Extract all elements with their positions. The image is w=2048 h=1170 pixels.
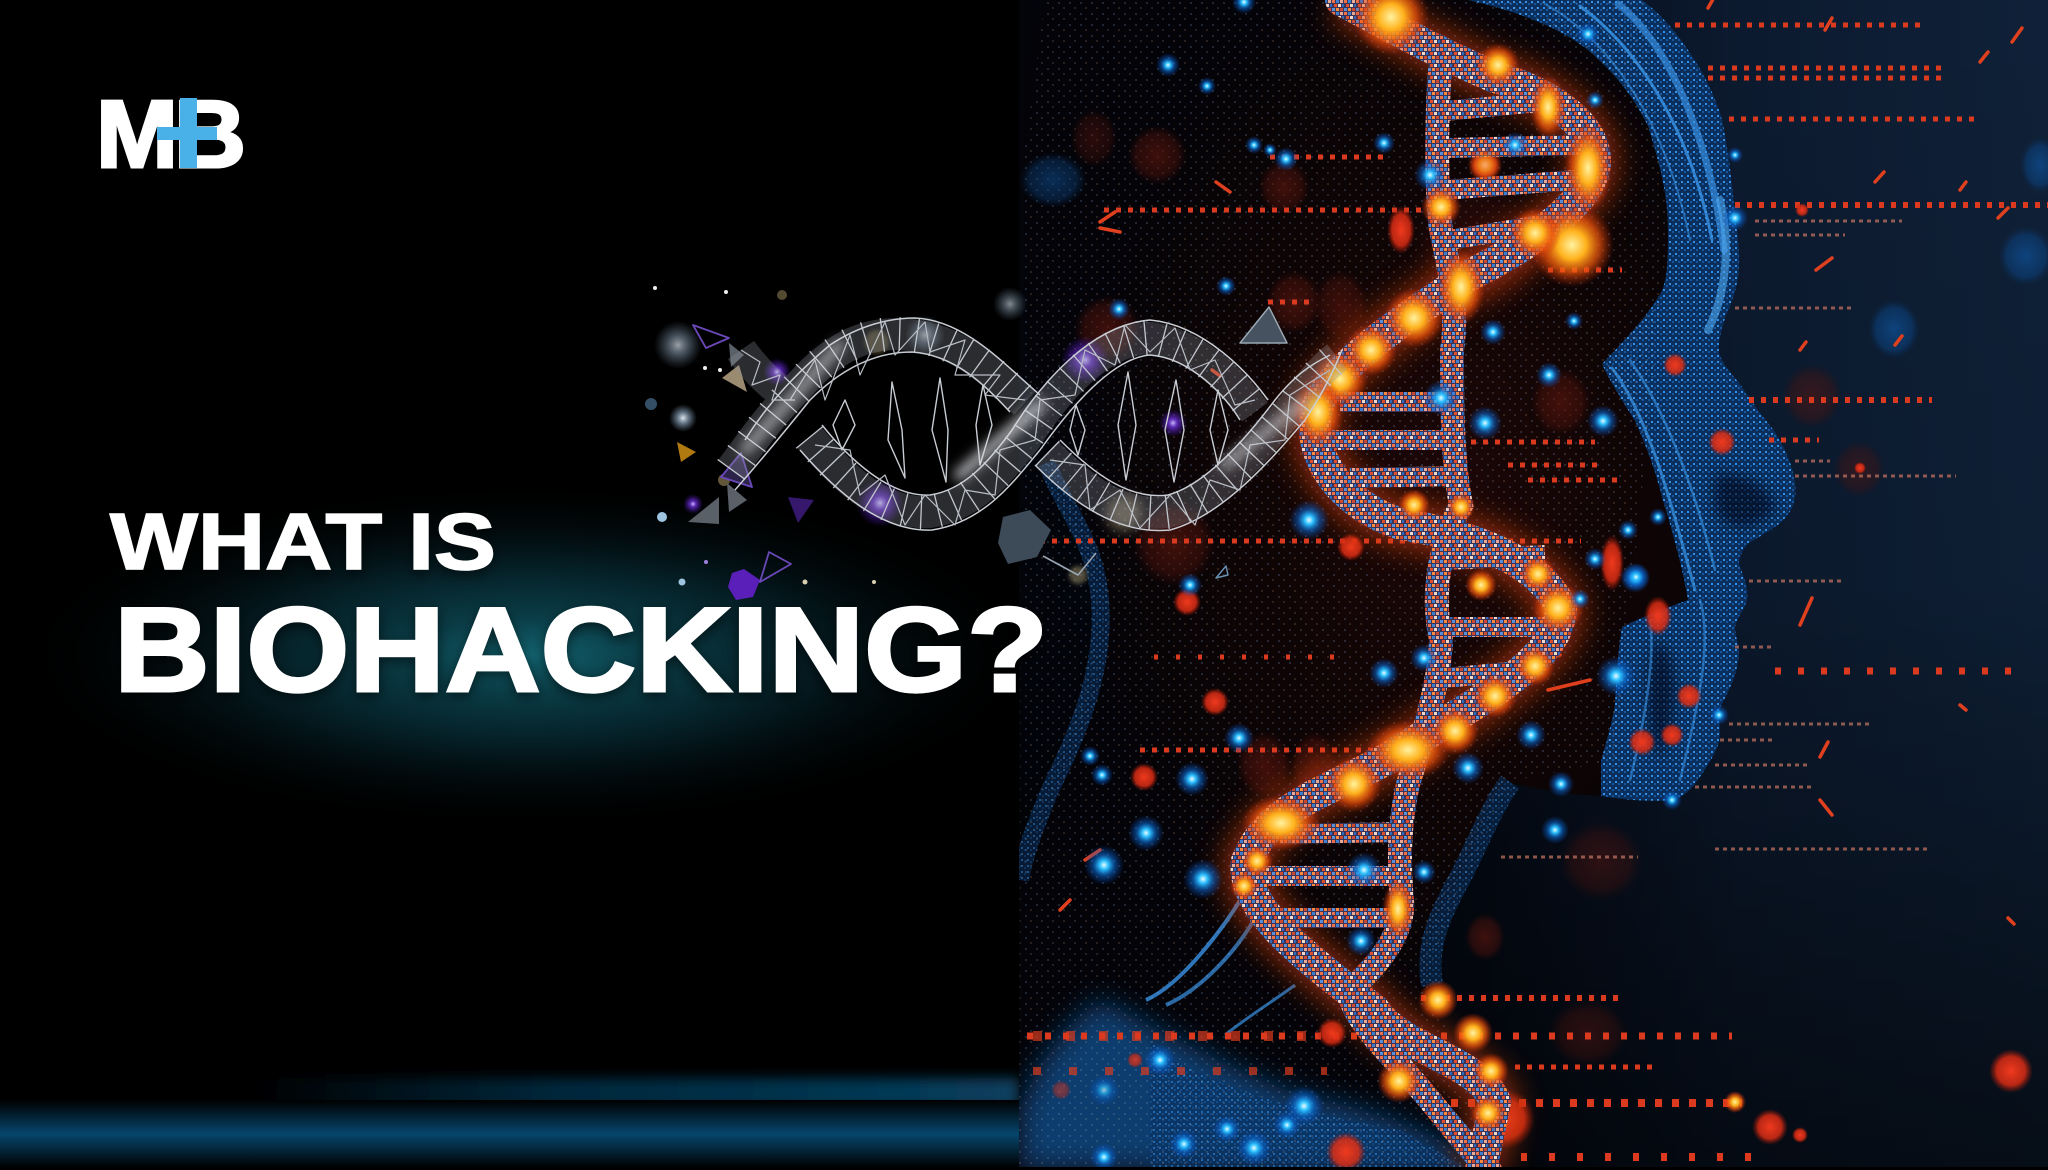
dark mouth and jaw shading bbox=[1648, 474, 1775, 760]
neck and shoulder blue body bbox=[1019, 900, 1466, 1167]
helix mesh cross-ties bbox=[731, 334, 1337, 513]
helix backbone strands bbox=[1247, 0, 1595, 1170]
teal glow behind title bbox=[10, 480, 1050, 830]
glowing orange nodes bbox=[1230, 0, 1746, 1131]
helix mesh edge lines bbox=[735, 318, 1342, 531]
title: What is Biohacking? bbox=[110, 497, 1048, 717]
helix rungs bbox=[1260, 100, 1585, 918]
dark red bokeh circles bbox=[1019, 108, 1885, 1067]
white wireframe DNA helix bbox=[731, 318, 1342, 531]
orange DNA double helix bbox=[1230, 0, 1746, 1170]
red dotted data lines bbox=[1027, 25, 2048, 1157]
logo letter M: M bbox=[96, 81, 178, 188]
logo blue plus bbox=[157, 98, 217, 168]
blue glowing light points bbox=[1080, 0, 1748, 1170]
photo panel: blue digital head with glowing DNA bbox=[1019, 0, 2048, 1170]
helix rung diamonds bbox=[833, 372, 1228, 482]
pale dotted texture inside head bbox=[1019, 0, 1668, 1170]
helix glow bbox=[1247, 0, 1595, 1170]
short red streaks bbox=[1060, 0, 2022, 924]
panel background bbox=[1019, 0, 2048, 1170]
right side blue bokeh bbox=[1868, 137, 2048, 359]
logo: M+B bbox=[96, 81, 246, 188]
title line one: WHAT IS bbox=[110, 497, 496, 586]
bright red spots bbox=[1051, 149, 2033, 1170]
pale thin data lines bbox=[1501, 221, 1956, 857]
title line two: BIOHACKING? bbox=[114, 583, 1048, 717]
bottom blue light bands bbox=[0, 1078, 1019, 1168]
helix solid gray strand bands bbox=[731, 334, 1337, 513]
scattered particles around white helix bbox=[645, 286, 1187, 586]
blue face and scalp band bbox=[1468, 0, 1795, 801]
neck dotted outlines bbox=[1020, 463, 1510, 985]
helix irregular triangulation bbox=[741, 322, 1330, 528]
face band highlight streaks bbox=[1545, 4, 1726, 780]
logo letter B: B bbox=[174, 81, 246, 188]
helix white light streaks bbox=[745, 345, 1300, 475]
floating polygons bbox=[677, 307, 1287, 600]
head silhouette bbox=[1162, 0, 1796, 902]
